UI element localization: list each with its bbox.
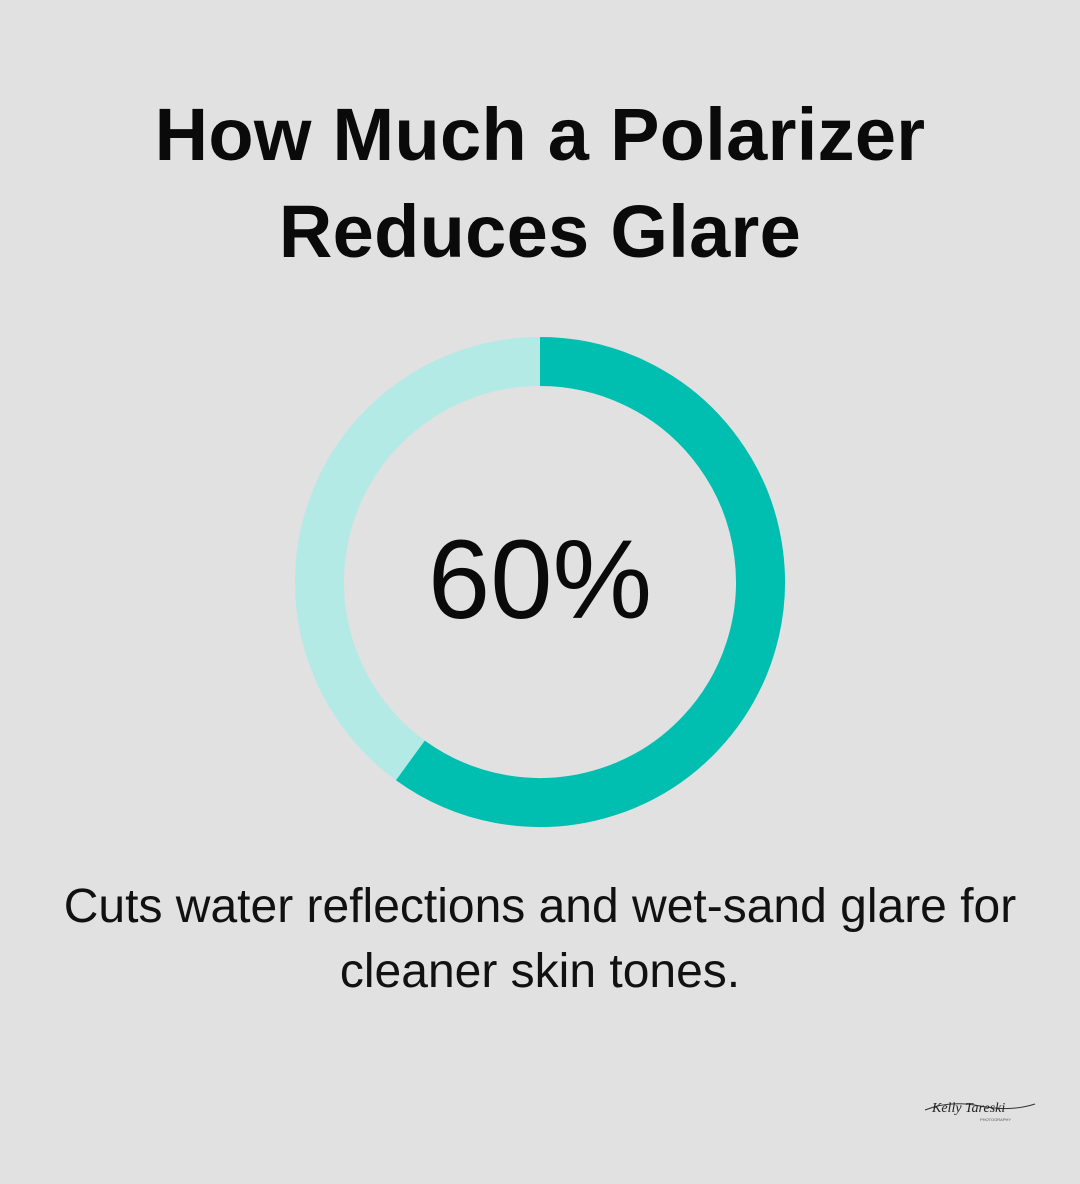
description xyxy=(64,880,1016,998)
remaining track xyxy=(320,362,760,802)
60% arc xyxy=(410,362,760,802)
description: Cuts water reflections and wet-sand glare for xyxy=(64,880,1016,933)
title xyxy=(155,93,925,273)
logo signature: Kelly Tareski xyxy=(931,1101,1005,1116)
title: How Much a Polarizer xyxy=(155,93,925,176)
percentage value: 60% xyxy=(428,517,652,642)
description: cleaner skin tones. xyxy=(340,945,740,998)
logo signature xyxy=(924,1101,1036,1122)
logo signature: PHOTOGRAPHY xyxy=(980,1117,1011,1122)
title: Reduces Glare xyxy=(279,190,801,273)
